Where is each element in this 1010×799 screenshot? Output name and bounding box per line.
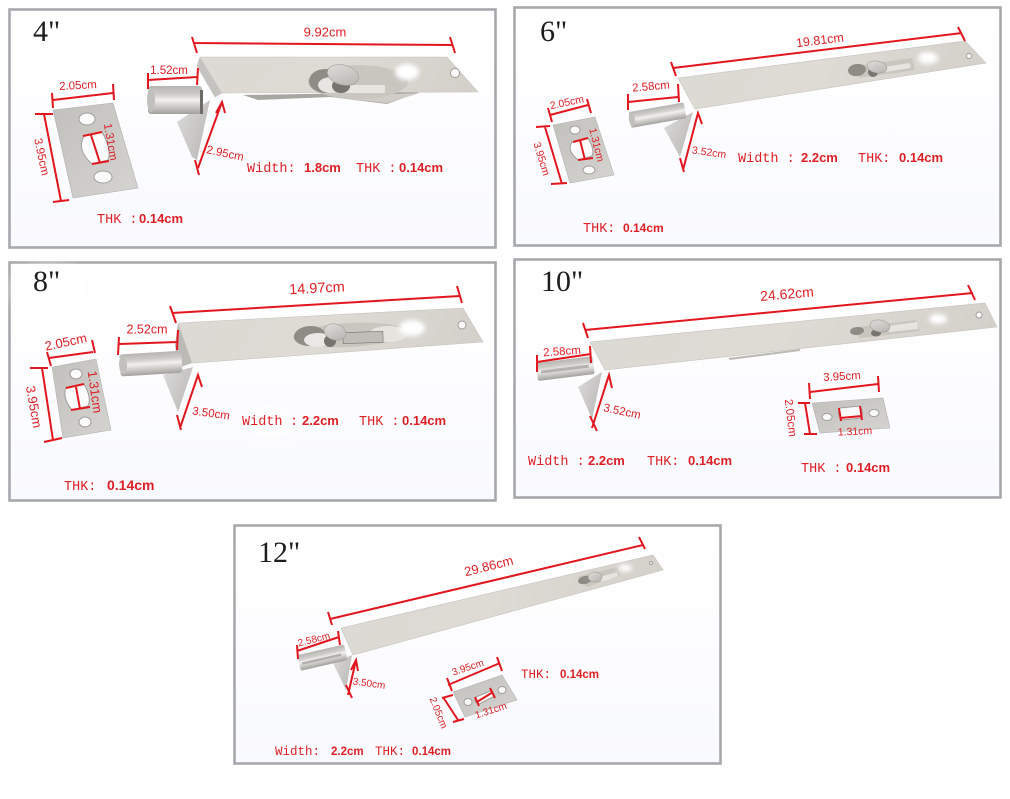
dimension 3.52cm [680,113,727,172]
bolt width and thickness: 0.14cm [402,413,446,428]
dimension 19.81cm: 19.81cm [795,30,845,50]
dimension 2.05cm: 2.05cm [43,330,88,354]
dimension 1.31cm: 1.31cm [586,127,606,163]
strike plate 10 inch [812,398,890,433]
dimension 3.52cm: 3.52cm [602,402,642,422]
dimension 1.31cm: 1.31cm [837,425,873,439]
bolt width and thickness: 1.8cm [304,160,341,175]
bolt 10 inch [536,303,997,419]
dimension 2.58cm [537,345,591,372]
dimension 2.05cm: 2.05cm [549,93,585,112]
dimension 2.05cm: 2.05cm [427,696,449,730]
soft white background patches [14,268,295,437]
dimension 3.50cm [346,660,386,698]
dimension 2.05cm [782,399,817,437]
dimension 14.97cm: 14.97cm [289,279,345,298]
dimension 9.92cm [192,24,455,53]
dimension 2.58cm [297,631,340,659]
dimension 3.95cm [31,114,69,202]
bolt width and thickness: 2.2cm [331,746,364,758]
dimension 1.31cm: 1.31cm [85,370,105,414]
panel: 8 inch bolt [10,262,496,500]
dimension 3.50cm: 3.50cm [191,405,231,423]
dimension 2.58cm: 2.58cm [297,631,331,649]
size heading 6 inch: 6" [540,15,567,48]
dimension 2.05cm [52,79,114,108]
dimension 2.05cm [548,93,591,122]
dimension 3.95cm: 3.95cm [823,370,861,384]
size heading 10 inch: 10" [541,265,583,298]
panel frame 8 inch [10,262,496,500]
dimension 9.92cm: 9.92cm [304,24,346,39]
panel: 12 inch bolt [234,526,720,764]
bolt width and thickness: Width: [275,745,320,759]
dimension 29.86cm [328,537,645,625]
bolt width and thickness: THK: [858,152,890,167]
bolt width and thickness: 0.14cm [688,453,732,468]
strike thickness: 0.14cm [107,477,154,493]
dimension 2.95cm [195,102,245,175]
dimension 2.52cm [118,322,178,355]
dimension 2.58cm: 2.58cm [543,345,581,359]
strike plate 8 inch [52,359,111,438]
strike thickness: 0.14cm [846,460,890,475]
strike plate 4 inch [53,103,138,198]
panel frame 10 inch [514,260,1000,498]
bolt width and thickness: 2.2cm [302,413,339,428]
panel: 6 inch bolt [514,8,1000,246]
dimension 2.52cm: 2.52cm [126,322,168,336]
dimension 2.05cm: 2.05cm [782,399,798,437]
bolt width and thickness: THK : [356,162,397,177]
bolt width and thickness: THK : [359,415,400,430]
bolt 8 inch [118,308,483,412]
dimension 3.52cm: 3.52cm [691,144,727,161]
dimension 2.95cm: 2.95cm [205,144,245,164]
bolt width and thickness: 0.14cm [399,160,443,175]
dimension 2.05cm: 2.05cm [59,79,97,93]
bolt 4 inch [147,57,478,160]
dimension 29.86cm: 29.86cm [463,553,515,579]
bolt width and thickness: 2.2cm [801,150,838,165]
dimension 2.58cm: 2.58cm [632,79,670,95]
dimension 14.97cm [170,279,462,323]
bolt width and thickness: THK: [375,745,405,759]
panel frame 6 inch [514,8,1000,246]
dimension 1.52cm [148,65,198,89]
size heading 8 inch: 8" [33,265,60,298]
dimension 1.31cm [573,127,606,163]
strike thickness: THK : [97,213,138,228]
dimension 1.31cm [837,406,873,439]
size heading 12 inch: 12" [258,536,300,569]
bolt width and thickness: Width : [738,152,795,167]
dimension 1.31cm [66,370,105,414]
strike thickness: 0.14cm [560,669,599,681]
dimension 2.58cm [628,79,679,110]
dimension 24.62cm: 24.62cm [759,283,814,304]
bolt width and thickness: : [290,415,298,430]
panel frame 12 inch [234,526,720,764]
dimension 2.05cm [427,695,464,730]
dimension 3.95cm: 3.95cm [451,658,485,678]
dimension 3.95cm [447,657,502,691]
bolt 12 inch [297,555,663,690]
dimension 3.50cm [177,375,231,430]
dimension 24.62cm [583,283,975,338]
strike thickness: THK: [64,480,96,495]
dimension 3.95cm [530,126,567,184]
bolt width and thickness: 0.14cm [412,746,451,758]
dimension 3.95cm [809,370,879,399]
dimension 3.95cm: 3.95cm [23,385,45,429]
bolt width and thickness: 0.14cm [899,150,943,165]
dimension 1.31cm [474,688,508,721]
strike thickness: THK: [521,668,551,682]
dimension 3.95cm: 3.95cm [530,141,552,177]
panel: 10 inch bolt [514,260,1000,498]
dimension 1.31cm: 1.31cm [474,701,508,721]
strike thickness: 0.14cm [139,211,183,226]
bolt 6 inch [628,41,986,157]
strike thickness: 0.14cm [623,221,664,235]
size heading 4 inch: 4" [33,15,60,48]
dimension 3.95cm: 3.95cm [31,137,51,177]
dimension 3.95cm [23,368,62,442]
dimension 1.31cm [83,122,119,164]
dimension 2.05cm [43,330,95,366]
bolt width and thickness: Width: [247,162,296,177]
bolt width and thickness: THK: [647,455,679,470]
dimension 3.52cm [590,375,642,431]
strike plate 12 inch [453,675,517,717]
dimension 19.81cm [671,27,965,76]
strike thickness: THK : [801,462,842,477]
dimension 3.50cm: 3.50cm [352,676,386,692]
strike plate 6 inch [553,117,614,183]
bolt width and thickness: 2.2cm [588,453,625,468]
panel frame 4 inch [10,10,496,248]
bolt width and thickness: Width [242,415,283,430]
dimension 1.31cm: 1.31cm [101,122,119,162]
dimension 1.52cm: 1.52cm [150,65,188,77]
panel: 4 inch bolt [10,10,496,248]
bolt width and thickness: Width : [528,455,585,470]
strike thickness: THK: [583,222,615,237]
